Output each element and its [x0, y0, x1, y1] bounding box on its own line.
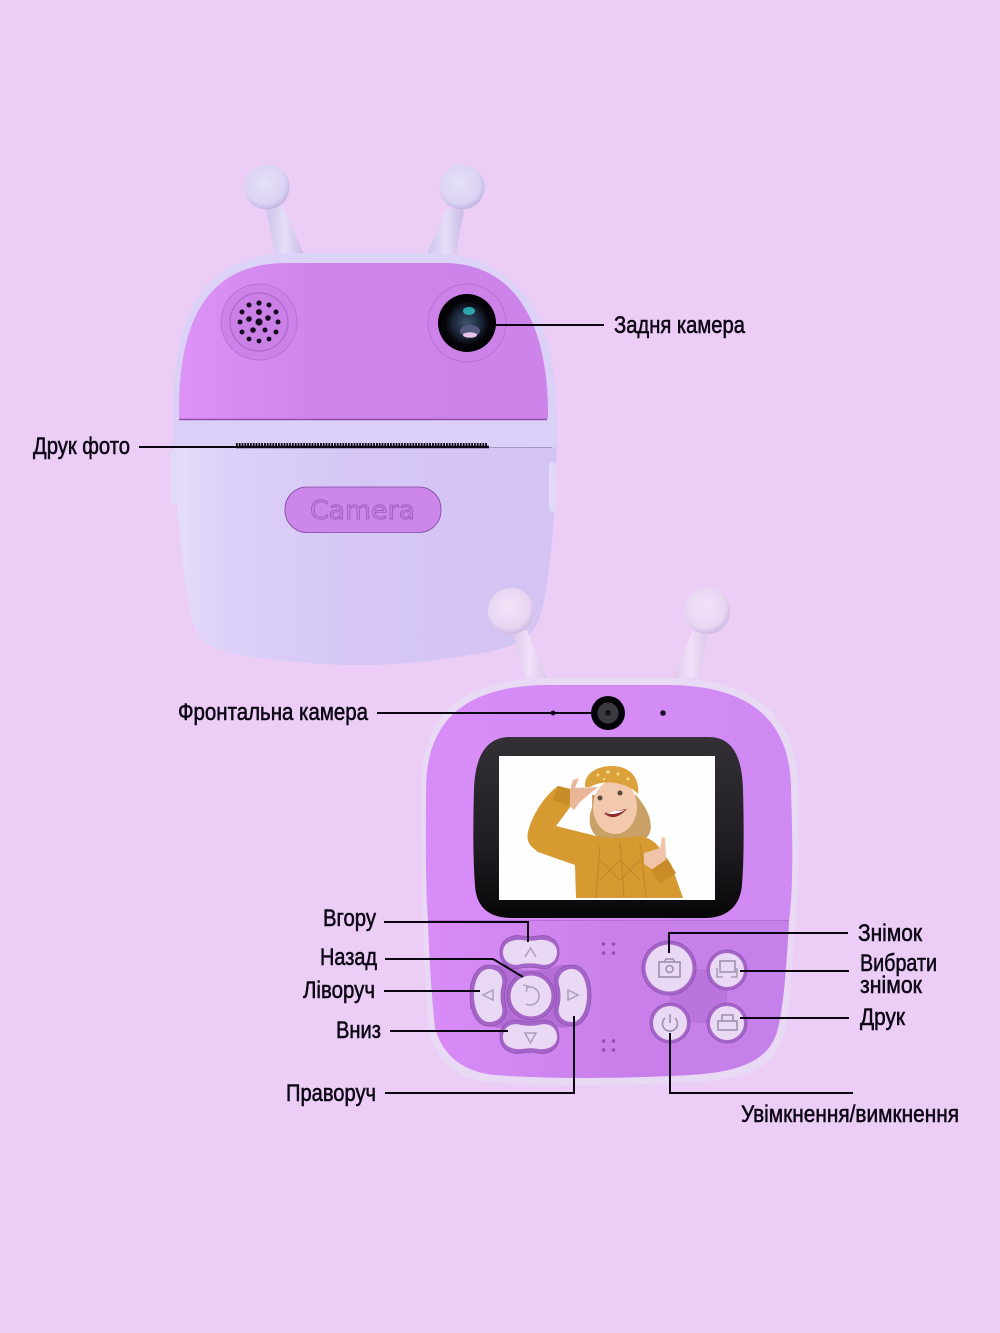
child face: [593, 780, 637, 834]
down button: [500, 1020, 559, 1053]
callout: rear camera: Задня камера: [614, 312, 745, 339]
up button: [500, 936, 559, 969]
print slot: [236, 444, 552, 448]
front camera purple face: [426, 685, 792, 921]
back camera purple top: [179, 263, 548, 420]
speaker holes top: [602, 942, 615, 955]
callout: shutter: Знімок: [858, 920, 922, 947]
right control well: [669, 968, 727, 1023]
rear camera lens: [428, 284, 506, 362]
indicator dots: [550, 710, 666, 716]
right button: [555, 965, 591, 1026]
front camera antennas: [488, 588, 730, 678]
callout: down: Вниз: [336, 1017, 381, 1044]
back camera body: [173, 253, 557, 665]
callout: power: Увімкнення/вимкнення: [741, 1101, 959, 1128]
d-pad well: [470, 965, 590, 1028]
screen bezel: [473, 737, 744, 918]
back view camera: [170, 164, 557, 665]
d-pad: [470, 936, 591, 1053]
back button: [507, 972, 555, 1020]
print button: [707, 1003, 747, 1043]
select button: [707, 950, 747, 990]
front camera lower panel: [428, 921, 789, 1078]
camera badge: Camera: [310, 496, 415, 526]
power button: [650, 1003, 690, 1043]
front view camera: [421, 588, 799, 1085]
back camera lower shell: [174, 447, 556, 665]
callout: select photo: знімок: [860, 972, 922, 999]
callout: left: Ліворуч: [303, 977, 375, 1004]
camera badge: [285, 487, 441, 532]
callout: photo print: Друк фото: [33, 433, 130, 460]
callout: power: [670, 1033, 959, 1128]
screen photo: [499, 756, 715, 900]
callout: up: [323, 905, 528, 942]
child hair: [590, 795, 651, 840]
side buttons: [170, 450, 556, 512]
shutter button: [642, 941, 696, 995]
callout: up: Вгору: [323, 905, 377, 932]
callout: print: Друк: [860, 1004, 905, 1031]
left button: [470, 965, 506, 1026]
callout: back: [320, 944, 523, 977]
back camera antennas: [244, 164, 484, 254]
front camera shell: [421, 678, 799, 1085]
callout: select photo: Вибрати: [860, 950, 937, 977]
speaker: [221, 284, 297, 360]
child left hand: [570, 778, 598, 810]
callout: right: [286, 1016, 574, 1107]
speaker holes bottom: [602, 1039, 615, 1052]
child sweater: [527, 786, 683, 898]
callout: front camera: Фронтальна камера: [178, 699, 368, 726]
callout: right: Праворуч: [286, 1080, 376, 1107]
child right hand: [644, 837, 666, 871]
callout: select photo: [740, 950, 937, 999]
callout: back: Назад: [320, 944, 377, 971]
child headband: [585, 766, 638, 794]
front camera lens: [591, 696, 625, 730]
callout: shutter: [669, 920, 922, 953]
